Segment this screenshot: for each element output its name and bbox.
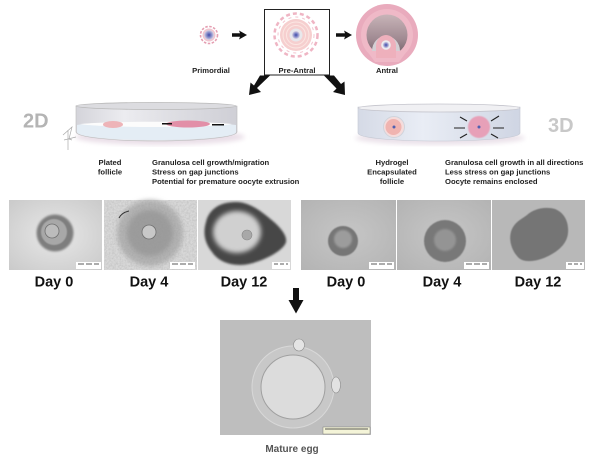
photo: 2D day 12 xyxy=(198,200,291,270)
label: Plated follicle: Plated xyxy=(99,158,122,167)
icon: antral follicle xyxy=(356,4,418,66)
text: 3D effects: Granulosa cell growth in all directions xyxy=(445,158,583,167)
arrow: to 2D xyxy=(249,76,270,95)
icon: pre-antral follicle xyxy=(274,14,318,56)
label: 2D day 12: Day 12 xyxy=(221,274,267,290)
box: pre-antral xyxy=(264,10,330,75)
follicle stages row xyxy=(192,4,418,75)
label: Pre-Antral: Pre-Antral xyxy=(279,66,315,75)
label: Primordial: Primordial xyxy=(192,66,230,75)
text: 2D effects: Granulosa cell growth/migration xyxy=(152,158,270,167)
photo: mature egg xyxy=(220,320,371,435)
arrow: down to mature egg xyxy=(288,288,304,314)
text: 2D effects: Potential for premature oocyte extrusion xyxy=(152,177,300,186)
icon: petri dish 2D xyxy=(63,102,245,150)
label: 3D day 0: Day 0 xyxy=(327,274,365,290)
label: 3D day 12: Day 12 xyxy=(515,274,561,290)
heading: 3D: 3D xyxy=(548,115,574,137)
icon: primordial follicle xyxy=(200,26,218,44)
label: Hydrogel Encapsulated follicle: follicle xyxy=(380,177,404,186)
text: 2D effects: Stress on gap junctions xyxy=(152,168,239,176)
label: Plated follicle: follicle xyxy=(98,168,122,176)
photo strip: 3D days xyxy=(301,200,585,290)
label: Antral: Antral xyxy=(376,66,398,75)
label: Hydrogel Encapsulated follicle: Encapsulated xyxy=(367,168,417,176)
label: Mature egg: Mature egg xyxy=(265,444,319,455)
photo: 2D day 0 xyxy=(9,200,102,270)
icon: petri dish 3D xyxy=(355,104,525,145)
photo: 3D day 4 xyxy=(397,200,491,270)
arrow: to 3D xyxy=(324,76,345,95)
arrow: pre-antral to antral xyxy=(336,30,352,40)
icon: signature scribble xyxy=(63,127,76,150)
label: 2D day 4: Day 4 xyxy=(130,274,168,290)
heading: 2D: 2D xyxy=(23,110,49,132)
arrows: growth in all directions xyxy=(454,116,504,138)
text: 3D effects: Oocyte remains enclosed xyxy=(445,177,538,186)
label: Hydrogel Encapsulated follicle: Hydrogel xyxy=(375,158,409,167)
panel: 3D culture xyxy=(355,104,583,186)
label: 2D day 0: Day 0 xyxy=(35,274,73,290)
photo strip: 2D days xyxy=(9,200,291,290)
photo: 2D day 4 xyxy=(104,200,197,270)
label: 3D day 4: Day 4 xyxy=(423,274,461,290)
text: 3D effects: Less stress on gap junctions xyxy=(445,168,550,176)
photo: 3D day 12 xyxy=(492,200,585,270)
photo: 3D day 0 xyxy=(301,200,396,270)
arrow: primordial to pre-antral xyxy=(232,30,247,40)
panel: 2D culture xyxy=(23,102,300,186)
